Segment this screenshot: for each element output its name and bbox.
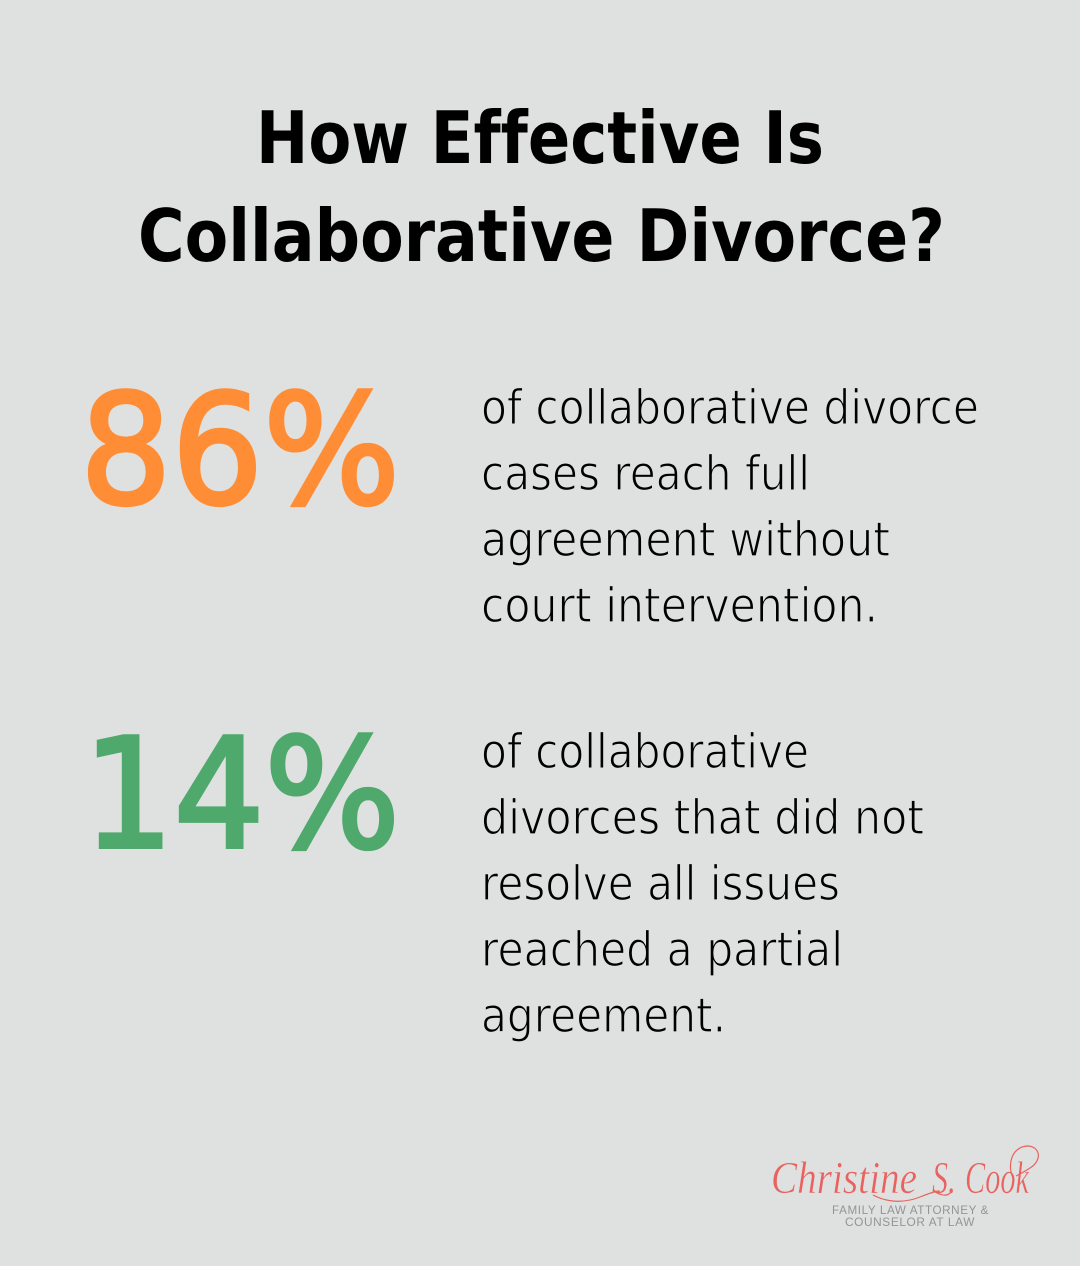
number: 86%: 86% — [80, 362, 400, 539]
logo swash — [873, 1146, 1038, 1201]
number: 14%: 14% — [83, 706, 400, 883]
text block: 86% description: court intervention. — [481, 578, 878, 634]
stat: 86% full agreement — [80, 362, 979, 634]
logo signature: Cook — [965, 1152, 1030, 1203]
title — [138, 96, 945, 278]
logo: Christine S. Cook — [771, 1146, 1038, 1229]
logo tagline — [832, 1205, 989, 1229]
text block: 14% description: reached a partial — [481, 922, 843, 978]
logo tagline: FAMILY LAW ATTORNEY & — [832, 1205, 989, 1217]
title: How Effective Is — [256, 96, 824, 180]
text block: 86% description — [481, 380, 979, 634]
logo signature — [771, 1152, 1030, 1203]
text block: 14% description: agreement. — [481, 988, 726, 1044]
logo signature: Christine — [771, 1152, 917, 1203]
text block: 14% description: resolve all issues — [481, 856, 840, 912]
stat: 14% partial agreement — [83, 706, 924, 1044]
title: Collaborative Divorce? — [138, 194, 945, 278]
text block: 14% description — [481, 724, 924, 1044]
text block: 86% description: of collaborative divorce — [481, 380, 979, 436]
logo signature: S. — [932, 1152, 956, 1203]
text block: 86% description: cases reach full — [481, 446, 810, 502]
text block: 14% description: of collaborative — [481, 724, 809, 780]
text block: 14% description: divorces that did not — [481, 790, 924, 846]
text block: 86% description: agreement without — [481, 512, 890, 568]
logo tagline: COUNSELOR AT LAW — [845, 1217, 975, 1229]
